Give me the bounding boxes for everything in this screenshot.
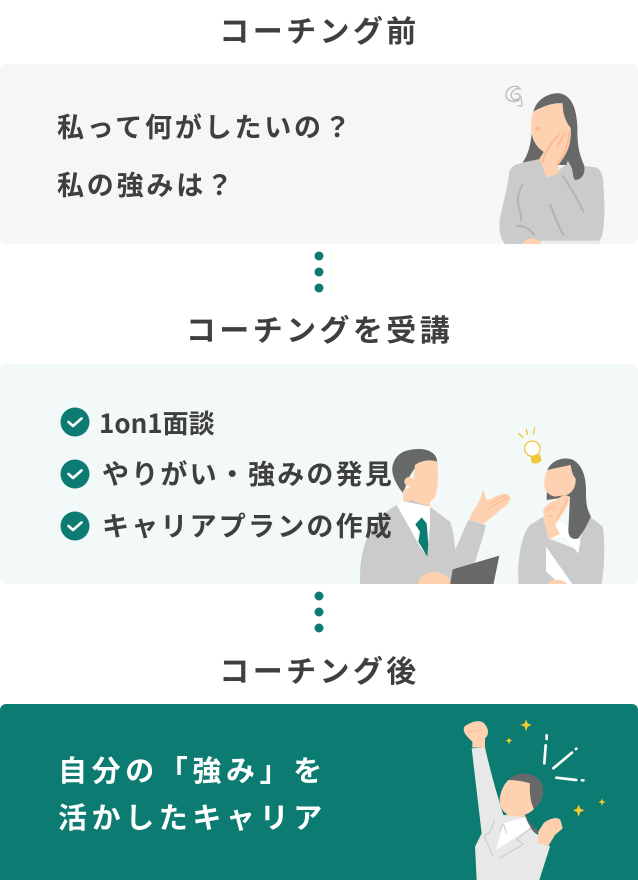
panel: before coaching bbox=[0, 64, 638, 244]
check icon 2 bbox=[60, 460, 90, 488]
text: after coaching line 2: 活かしたキャリア bbox=[58, 803, 327, 835]
panel: after coaching bbox=[0, 704, 638, 880]
check icon 1 bbox=[60, 408, 90, 436]
text: before coaching question 2: 私の強みは？ bbox=[57, 171, 236, 201]
check icon 3 bbox=[60, 512, 90, 540]
heading: before coaching: コーチング前 bbox=[219, 16, 420, 49]
list item 2: やりがい・強みの発見 bbox=[102, 460, 394, 490]
checklist bbox=[60, 408, 90, 540]
text: before coaching question 1: 私って何がしたいの？ bbox=[57, 113, 354, 143]
text: after coaching line 1: 自分の「強み」を bbox=[58, 756, 327, 788]
list item 1: 1on1面談 bbox=[99, 404, 215, 441]
list item 3: キャリアプランの作成 bbox=[102, 512, 394, 542]
illustration: man and woman talking bbox=[360, 427, 604, 584]
panel: taking coaching bbox=[0, 364, 638, 584]
heading: taking coaching: コーチングを受講 bbox=[186, 315, 453, 348]
heading: after coaching: コーチング後 bbox=[219, 656, 420, 689]
illustration: worried woman bbox=[499, 86, 604, 244]
